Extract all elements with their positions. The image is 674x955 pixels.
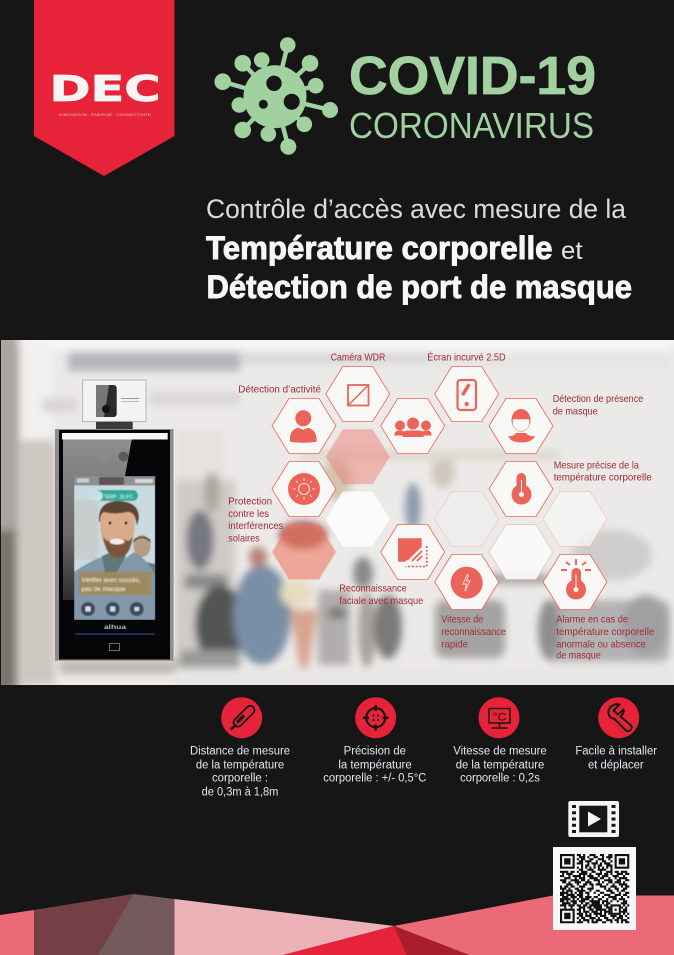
- terminal body: [55, 429, 174, 661]
- feature labels: de masque: [556, 650, 601, 661]
- heading text block: [206, 194, 632, 305]
- heading text block: Détection de port de masque: [206, 269, 632, 305]
- spec: measurement speed: °C: [492, 712, 507, 724]
- feature labels: Protection: [228, 497, 272, 508]
- feature labels: contre les: [228, 509, 269, 520]
- hexagon: group: [381, 398, 445, 454]
- device: access control terminal: [55, 380, 174, 661]
- spec: easy to install: [575, 697, 657, 771]
- second person: [134, 535, 150, 557]
- verification caption: [79, 572, 152, 595]
- feature labels: température corporelle: [554, 473, 652, 484]
- spec: measurement precision: [323, 697, 426, 785]
- face: [99, 511, 136, 545]
- feature labels: faciale avec masque: [339, 596, 424, 607]
- icon: coronavirus: [214, 37, 338, 155]
- feature labels: reconnaissance: [441, 627, 506, 638]
- spec: measurement precision: la température: [338, 759, 412, 771]
- feature labels: rapide: [441, 639, 468, 650]
- verification caption: Vérifier avec succès,: [82, 577, 141, 584]
- spec: measurement speed: corporelle : 0,2s: [460, 773, 540, 785]
- verification caption: pas de masque: [82, 586, 126, 593]
- spec: measuring distance: de 0,3m à 1,8m: [202, 786, 278, 798]
- QR code: [553, 847, 636, 930]
- feature labels: de masque: [553, 407, 598, 418]
- hexagon: alarm: [543, 554, 607, 610]
- spec: measurement speed: [453, 697, 547, 785]
- feature labels: Alarme en cas de: [556, 615, 628, 626]
- hexagon: 2.5D curved screen: [435, 366, 499, 422]
- feature labels: Caméra WDR: [331, 353, 385, 364]
- heading text block: et: [561, 237, 583, 265]
- subtitle: CORONAVIRUS: CORONAVIRUS: [349, 105, 594, 146]
- hexagon: mask detection: [489, 398, 553, 454]
- heading text block: Contrôle d’accès avec mesure de la: [206, 194, 627, 224]
- feature labels: Écran incurvé 2.5D: [427, 351, 506, 364]
- terminal screen: [74, 476, 155, 620]
- spec: measuring distance: corporelle :: [212, 773, 268, 785]
- hexagon: precise temperature: [489, 462, 553, 516]
- spec: measuring distance: [190, 697, 290, 798]
- feature labels: Détection d’activité: [238, 384, 321, 395]
- feature labels: température corporelle: [556, 627, 655, 638]
- spec: measurement speed: Vitesse de mesure: [453, 746, 547, 758]
- feature labels: Vitesse de: [441, 615, 484, 626]
- decorative empty hexagons: [272, 429, 607, 580]
- hexagon: activity detection: [272, 398, 336, 454]
- hexagon: face recognition with mask: [381, 524, 445, 580]
- heading text block: Température corporelle: [206, 230, 552, 266]
- icon: video film: [568, 801, 619, 837]
- header ribbon with DEC logo: DEC: [50, 69, 160, 110]
- terminal brand: alhua: [104, 625, 127, 631]
- feature labels: solaires: [228, 534, 260, 545]
- spec: measurement speed: de la température: [456, 759, 544, 771]
- feature labels: interférences: [228, 521, 283, 532]
- title: COVID-19: COVID-19: [349, 46, 596, 106]
- spec: measuring distance: de la température: [196, 759, 284, 771]
- thermal camera module: [83, 380, 146, 429]
- spec: measurement precision: corporelle : +/- 0,5°C: [323, 773, 426, 785]
- feature labels: Mesure précise de la: [554, 461, 639, 472]
- feature labels: [228, 351, 655, 661]
- feature labels: Détection de présence: [553, 394, 644, 405]
- temperature pill: TEMP : 36.5°C: [104, 494, 133, 500]
- panel: feature hexagons: [272, 366, 607, 610]
- panel: blurred photo background: [0, 335, 674, 695]
- screen buttons: [81, 602, 144, 616]
- spec: easy to install: et déplacer: [588, 759, 644, 771]
- header ribbon with DEC logo: [34, 0, 174, 176]
- hexagon: WDR camera: [326, 366, 390, 422]
- spec: measuring distance: Distance de mesure: [190, 746, 290, 758]
- hexagon: sun protection: [272, 462, 336, 516]
- feature labels: anormale ou absence: [556, 639, 646, 650]
- spec: easy to install: Facile à installer: [575, 746, 657, 758]
- footer polygons: [0, 894, 674, 955]
- hexagon: fast recognition speed: [435, 554, 499, 610]
- temperature pill: [93, 490, 138, 501]
- shirt: [74, 552, 155, 620]
- feature labels: Reconnaissance: [339, 584, 407, 595]
- spec: measurement precision: Précision de: [344, 746, 406, 758]
- header ribbon with DEC logo: INNOVATION - ENERGIE - CONNECTIVITE: [59, 113, 152, 117]
